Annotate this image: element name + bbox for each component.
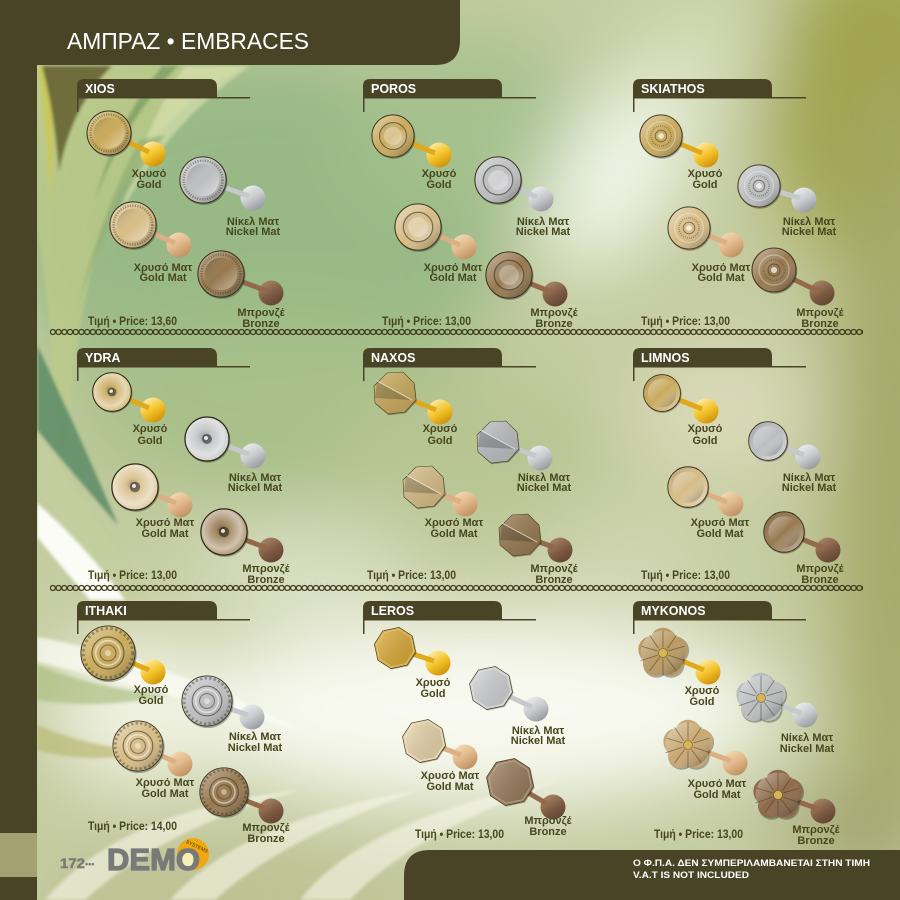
embrace: nickel mat xyxy=(736,673,835,755)
decorative swooshes xyxy=(37,66,560,900)
embrace: nickel mat xyxy=(738,165,837,238)
embrace: gold mat: Gold Mat xyxy=(430,528,478,540)
embrace: bronze: Μπρονζέ xyxy=(796,307,845,319)
panel: SKIATHOS xyxy=(633,79,845,330)
logo: DEMO with page number: ••• xyxy=(85,859,94,869)
embrace: bronze xyxy=(198,251,286,330)
embrace: nickel mat xyxy=(475,157,571,238)
embrace: gold mat xyxy=(663,720,748,801)
embrace: nickel mat: Nickel Mat xyxy=(782,482,837,494)
embrace: gold: Χρυσό xyxy=(423,423,458,435)
embrace: bronze: Μπρονζέ xyxy=(242,822,291,834)
price: Τιμή • Price: 13,00 xyxy=(654,827,743,841)
footer panel: VAT note: V.A.T IS NOT INCLUDED xyxy=(633,870,750,880)
embrace: bronze xyxy=(486,252,579,330)
embrace: nickel mat: Nickel Mat xyxy=(517,482,572,494)
page tab xyxy=(0,833,37,877)
embrace: bronze: Bronze xyxy=(247,833,285,845)
embrace: gold mat xyxy=(395,204,482,284)
embrace: bronze xyxy=(764,512,845,586)
panel: YDRA xyxy=(77,348,291,586)
embrace: gold mat xyxy=(403,466,483,540)
embrace: nickel mat: Νίκελ Ματ xyxy=(783,472,835,484)
embrace: nickel mat xyxy=(182,676,283,754)
embrace: gold: Gold xyxy=(692,179,718,191)
embrace: gold mat: Gold Mat xyxy=(693,789,741,801)
title: ΑΜΠΡΑΖ • EMBRACES xyxy=(67,28,309,54)
embrace: bronze: Bronze xyxy=(247,574,285,586)
embrace: gold: Gold xyxy=(137,435,163,447)
embrace: nickel mat: Nickel Mat xyxy=(511,735,566,747)
embrace: gold xyxy=(93,373,168,447)
embrace: gold: Gold xyxy=(427,435,453,447)
embrace: gold xyxy=(374,372,458,447)
embrace: gold xyxy=(372,115,457,191)
embrace: gold: Χρυσό xyxy=(132,168,167,180)
embrace: gold mat: Χρυσό Ματ xyxy=(421,770,479,782)
embrace: nickel mat xyxy=(180,157,281,238)
embrace: gold mat: Gold Mat xyxy=(426,781,474,793)
embrace: nickel mat xyxy=(467,664,566,747)
embrace: gold xyxy=(640,115,723,191)
embrace: gold: Gold xyxy=(426,179,452,191)
embrace: gold xyxy=(644,375,723,447)
embrace: bronze: Μπρονζέ xyxy=(796,563,845,575)
heading: XIOS: XIOS xyxy=(85,82,115,96)
heading: NAXOS xyxy=(363,348,536,381)
panel: LEROS xyxy=(363,601,573,841)
embrace: gold mat: Gold Mat xyxy=(141,788,189,800)
heading: POROS xyxy=(363,79,536,112)
panel: MYKONOS xyxy=(633,601,841,847)
embrace: gold mat: Χρυσό Ματ xyxy=(691,517,749,529)
embrace: bronze: Bronze xyxy=(801,318,839,330)
heading: LIMNOS: LIMNOS xyxy=(641,351,690,365)
embrace: gold mat: Gold Mat xyxy=(696,528,744,540)
price: Τιμή • Price: 14,00 xyxy=(88,819,177,833)
embrace: bronze xyxy=(753,770,841,847)
price: Τιμή • Price: 13,00 xyxy=(415,827,504,841)
embrace: nickel mat: Νίκελ Ματ xyxy=(227,216,279,228)
embrace: gold: Χρυσό xyxy=(688,423,723,435)
embrace: gold mat xyxy=(668,467,749,540)
embrace: nickel mat: Nickel Mat xyxy=(228,742,283,754)
embrace: gold: Gold xyxy=(136,179,162,191)
embrace: bronze xyxy=(200,768,291,845)
embrace: nickel mat: Nickel Mat xyxy=(782,226,837,238)
embrace: gold mat: Gold Mat xyxy=(697,272,745,284)
embrace: nickel mat: Νίκελ Ματ xyxy=(512,725,564,737)
embrace: gold: Χρυσό xyxy=(685,685,720,697)
embrace: gold: Gold xyxy=(689,696,715,708)
embrace: bronze xyxy=(499,514,579,586)
embrace: nickel mat: Νίκελ Ματ xyxy=(517,216,569,228)
embrace: gold mat: Gold Mat xyxy=(429,272,477,284)
price: Τιμή • Price: 13,00 xyxy=(382,314,471,328)
embrace: gold mat: Χρυσό Ματ xyxy=(425,517,483,529)
embrace: nickel mat: Nickel Mat xyxy=(516,226,571,238)
panel: ITHAKI xyxy=(77,601,291,845)
logo: DEMO with page number: SYSTEMS xyxy=(185,839,209,855)
heading: XIOS xyxy=(77,79,250,112)
embrace: bronze: Μπρονζέ xyxy=(530,563,579,575)
heading: LIMNOS xyxy=(633,348,806,381)
logo: DEMO with page number xyxy=(60,838,209,877)
embrace: nickel mat xyxy=(477,421,572,494)
embrace: gold mat: Χρυσό Ματ xyxy=(692,262,750,274)
embrace: nickel mat: Νίκελ Ματ xyxy=(229,731,281,743)
embrace: gold: Χρυσό xyxy=(416,677,451,689)
panel: POROS xyxy=(363,79,579,330)
embrace: nickel mat: Νίκελ Ματ xyxy=(781,732,833,744)
logo: DEMO with page number: 172 xyxy=(60,855,85,871)
panel: NAXOS xyxy=(363,348,579,586)
heading: YDRA: YDRA xyxy=(85,351,120,365)
embrace: gold mat xyxy=(112,464,194,540)
price: Τιμή • Price: 13,00 xyxy=(641,314,730,328)
embrace: gold mat: Gold Mat xyxy=(141,528,189,540)
embrace: bronze xyxy=(484,756,573,838)
embrace: nickel mat: Νίκελ Ματ xyxy=(518,472,570,484)
embrace: bronze: Bronze xyxy=(535,574,573,586)
embrace: gold xyxy=(638,628,720,708)
heading: LEROS xyxy=(363,601,536,634)
embrace: gold xyxy=(87,111,167,191)
logo: DEMO with page number: DEMO xyxy=(107,842,200,877)
embrace: bronze xyxy=(201,509,291,586)
left frame bar xyxy=(0,0,37,900)
embrace: nickel mat: Nickel Mat xyxy=(226,226,281,238)
embrace: bronze: Bronze xyxy=(242,318,280,330)
embrace: nickel mat: Nickel Mat xyxy=(780,743,835,755)
heading: LEROS: LEROS xyxy=(371,604,414,618)
heading: SKIATHOS: SKIATHOS xyxy=(641,82,705,96)
footer panel: VAT note: Ο Φ.Π.Α. ΔΕΝ ΣΥΜΠΕΡΙΛΑΜΒΑΝΕΤΑΙ ΣΤΗΝ ΤΙΜΗ xyxy=(633,858,870,868)
embrace: gold mat: Χρυσό Ματ xyxy=(134,262,192,274)
embrace: gold mat xyxy=(110,202,192,284)
embrace: nickel mat xyxy=(185,417,283,494)
embrace: gold mat xyxy=(668,207,750,284)
embrace: gold: Χρυσό xyxy=(134,684,169,696)
price: Τιμή • Price: 13,00 xyxy=(367,568,456,582)
embrace: gold: Χρυσό xyxy=(422,168,457,180)
panel: XIOS xyxy=(77,79,286,330)
embrace: gold mat xyxy=(400,717,479,793)
embrace: gold mat xyxy=(113,721,194,800)
embrace: bronze: Μπρονζέ xyxy=(530,307,579,319)
embrace: bronze: Μπρονζέ xyxy=(524,815,573,827)
heading: ITHAKI xyxy=(77,601,250,634)
embrace: gold mat: Χρυσό Ματ xyxy=(688,778,746,790)
embrace: bronze: Bronze xyxy=(797,835,835,847)
embrace: nickel mat: Νίκελ Ματ xyxy=(229,472,281,484)
embrace: gold: Χρυσό xyxy=(133,423,168,435)
footer panel: VAT note xyxy=(404,850,900,900)
embrace: bronze: Bronze xyxy=(801,574,839,586)
chain divider 1 xyxy=(50,328,863,336)
embrace: nickel mat xyxy=(749,422,837,494)
chain divider 2 xyxy=(50,583,863,591)
embrace: gold: Gold xyxy=(420,688,446,700)
heading: MYKONOS xyxy=(633,601,806,634)
embrace: gold mat: Χρυσό Ματ xyxy=(136,517,194,529)
embrace: bronze: Μπρονζέ xyxy=(792,824,841,836)
embrace: gold mat: Χρυσό Ματ xyxy=(136,777,194,789)
embrace: gold xyxy=(81,626,169,707)
price: Τιμή • Price: 13,00 xyxy=(641,568,730,582)
price: Τιμή • Price: 13,60 xyxy=(88,314,177,328)
price: Τιμή • Price: 13,00 xyxy=(88,568,177,582)
heading: POROS: POROS xyxy=(371,82,416,96)
heading: ITHAKI: ITHAKI xyxy=(85,604,127,618)
panel: LIMNOS xyxy=(633,348,845,586)
heading: SKIATHOS xyxy=(633,79,806,112)
embrace: gold mat: Χρυσό Ματ xyxy=(424,262,482,274)
embrace: nickel mat: Νίκελ Ματ xyxy=(783,216,835,228)
heading: YDRA xyxy=(77,348,250,381)
embrace: bronze: Bronze xyxy=(535,318,573,330)
embrace: bronze: Μπρονζέ xyxy=(237,307,286,319)
embrace: gold: Gold xyxy=(138,695,164,707)
embrace: gold: Χρυσό xyxy=(688,168,723,180)
embrace: gold mat: Gold Mat xyxy=(139,272,187,284)
heading: NAXOS: NAXOS xyxy=(371,351,415,365)
embrace: gold: Gold xyxy=(692,435,718,447)
embrace: bronze xyxy=(752,248,845,330)
embrace: bronze: Bronze xyxy=(529,826,567,838)
title band xyxy=(0,0,460,65)
heading: MYKONOS: MYKONOS xyxy=(641,604,706,618)
embrace: gold xyxy=(372,625,451,700)
embrace: bronze: Μπρονζέ xyxy=(242,563,291,575)
embrace: nickel mat: Nickel Mat xyxy=(228,482,283,494)
